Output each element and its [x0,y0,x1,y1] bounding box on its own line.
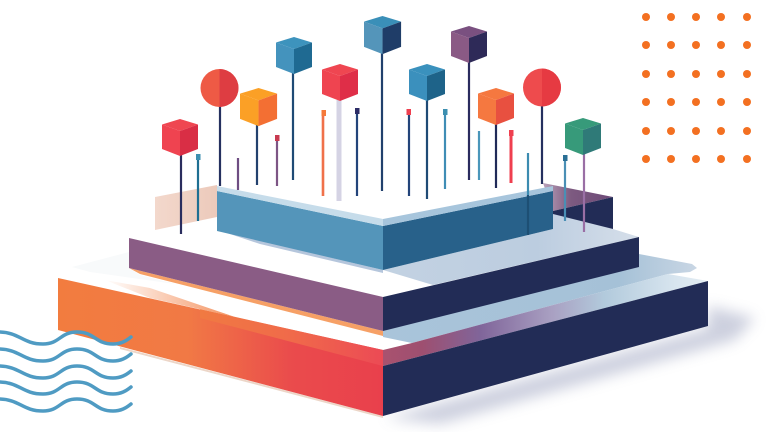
middle step orange underside [129,268,383,336]
bottom step shaded surface [383,254,697,343]
front face contact shadow [120,347,383,418]
cube: green [565,118,601,155]
top block front rim [217,186,383,226]
cube: orange right [478,88,514,125]
cube: blue top [364,16,401,54]
top block shadow [224,232,383,273]
decorative orange dot grid [642,13,751,163]
bottom step front face [58,278,383,416]
top block side face [383,191,553,270]
back panel: peach [155,185,217,230]
cube: blue right [409,64,445,101]
bottom step pale top surface [72,252,175,284]
cube: red centre [322,64,358,101]
middle step [129,212,639,336]
cube: purple [451,26,487,63]
bottom step rim band [383,274,708,366]
back box: dark [543,183,613,229]
cube: blue left [276,37,312,74]
middle step shaded surface [383,212,639,285]
lollipop circle: left [200,69,238,107]
cube: red left [162,119,198,156]
top block side rim [383,186,553,226]
bottom step front rim [200,309,383,366]
poles [181,53,584,235]
pole caps [196,108,568,161]
middle step side face [383,237,639,331]
top block front face [217,191,383,270]
bottom step side face [383,281,708,416]
ground shadow [385,306,755,424]
lollipop circle: right [523,68,561,106]
cube: orange [240,88,277,126]
middle step front face [129,238,383,331]
top block [217,186,553,273]
decorative blue waves [0,332,131,411]
bottom step [58,252,708,418]
bottom step rim fade [105,280,235,317]
